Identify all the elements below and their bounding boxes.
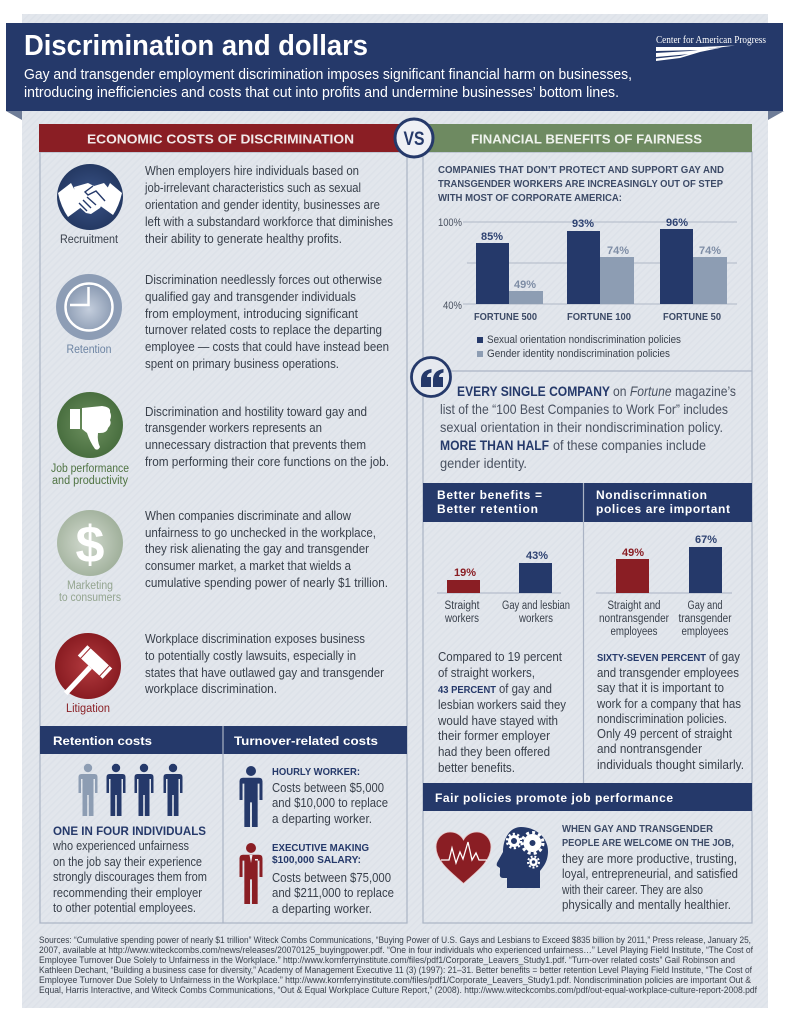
icon: litigation gavel [53, 633, 121, 705]
text: nondiscrimination: Only 49 percent of straight [597, 726, 732, 741]
text: nondiscrimination: nondiscrimination policies. [597, 711, 727, 726]
bar chart: fortune companies: 93% [572, 218, 594, 230]
text: chart heading: TRANSGENDER WORKERS ARE INCREASINGLY OUT OF STEP [438, 178, 723, 190]
text: nondiscrimination: work for a company that has [596, 696, 741, 711]
text: one in four individuals [52, 826, 207, 915]
text: fair policies [561, 823, 738, 912]
bar chart: nondiscrimination: employees [610, 626, 658, 638]
text: fair policies: physically and mentally healthier. [562, 897, 731, 912]
icon: marketing dollar [57, 510, 123, 576]
text: litigation: to potentially costly lawsuits, especially in [145, 648, 356, 663]
subtitle [24, 66, 632, 101]
text: one in four individuals: who experienced unfairness [52, 838, 189, 853]
text: sources: Employee Turnover Due Solely to Unfairness in the Workplace.” http://www.kornferryinstitute.com/files/pdf1/Corporate_Leavers_Study1.pdf. Nondiscrimination policies are important Out & [39, 974, 752, 985]
bar chart: fortune companies: FORTUNE 50 [663, 311, 721, 323]
text: marketing: unfairness to go unchecked in the workplace, [145, 525, 376, 540]
legend: Sexual orientation nondiscrimination policies [487, 334, 681, 346]
bar chart: fortune companies: 85% [481, 231, 503, 243]
text: one in four individuals: strongly discourages them from [53, 869, 207, 884]
label: litigation: Litigation [66, 703, 110, 715]
logo: Center for American Progress [656, 35, 766, 61]
bar chart: fortune companies: 100% [438, 217, 462, 229]
bar chart: fortune companies [438, 217, 737, 323]
bar chart: nondiscrimination: Straight and [608, 600, 660, 612]
text: litigation [144, 631, 385, 696]
text: better benefits: lesbian workers said they [438, 697, 566, 712]
logo: Center for American Progress: Center for American Progress [656, 35, 766, 46]
bar chart: nondiscrimination [596, 534, 732, 638]
header banner [6, 23, 784, 120]
heading: financial benefits: FINANCIAL BENEFITS OF FAIRNESS [471, 132, 702, 146]
bar chart: fortune companies: 74% [607, 245, 629, 257]
text: quote callout [440, 383, 736, 471]
text: quote callout: sexual orientation in their nondiscrimination policy. [440, 419, 723, 435]
text: executive: $100,000 SALARY: [272, 854, 361, 866]
panel: nondiscrimination policies: polices are important [596, 502, 730, 516]
text: executive: Costs between $75,000 [272, 870, 391, 885]
label: marketing to consumers: to consumers [59, 592, 121, 604]
bar chart: fortune companies: 96% [666, 217, 688, 229]
bar chart: nondiscrimination: nontransgender [599, 613, 669, 625]
text: hourly worker: a departing worker. [272, 811, 372, 826]
label: job performance and productivity: and productivity [52, 475, 128, 487]
label: job performance and productivity [51, 463, 129, 487]
text: retention: qualified gay and transgender individuals [145, 289, 356, 304]
icon: hourly worker [240, 766, 262, 827]
bar chart: better benefits: workers [444, 613, 479, 625]
text: recruitment: job-irrelevant characteristics such as sexual [144, 180, 361, 195]
text: quote callout: on Fortune magazine’s [613, 383, 736, 399]
bar chart: nondiscrimination: transgender [678, 613, 732, 625]
text: better benefits: their former employer [438, 728, 551, 743]
text: quote callout: of these companies include [553, 437, 706, 453]
title: Discrimination and dollars [24, 30, 368, 62]
panel: fair policies promote job performance [423, 783, 752, 912]
text: executive: EXECUTIVE MAKING [272, 842, 369, 854]
panel: better benefits [423, 483, 583, 775]
text: quote callout: gender identity. [440, 455, 527, 471]
bar chart: better benefits: 19% [454, 567, 476, 579]
text: recruitment: left with a substandard workforce that diminishes [145, 214, 393, 229]
text: job performance: Discrimination and hostility toward gay and [145, 404, 367, 419]
bar chart: fortune companies: FORTUNE 100 [567, 311, 631, 323]
text: marketing: consumer market, a market that wields a [145, 558, 352, 573]
text: chart heading [438, 164, 724, 204]
label: marketing to consumers: Marketing [67, 580, 113, 592]
text: job performance: transgender workers represents an [145, 420, 322, 435]
bar chart: fortune companies: FORTUNE 500 [474, 311, 537, 323]
icon: heart with heartbeat [436, 832, 491, 884]
bar chart: better benefits: Gay and lesbian [502, 600, 570, 612]
text: litigation: workplace discrimination. [144, 681, 277, 696]
icon: quote mark [412, 358, 450, 396]
panel: economic costs of discrimination [39, 124, 411, 923]
text: better benefits: of straight workers, [438, 665, 535, 680]
icon: four people [78, 764, 182, 816]
label: retention: Retention [66, 344, 112, 356]
text: litigation: states that have outlawed gay and transgender [145, 665, 385, 680]
bar chart: better benefits: Straight [444, 600, 480, 612]
subtitle: Gay and transgender employment discrimination imposes significant financial harm on businesses, [24, 66, 632, 83]
text: nondiscrimination: individuals thought similarly. [597, 757, 744, 772]
panel: nondiscrimination policies [584, 483, 752, 783]
text: sources [39, 934, 757, 995]
panel: retention costs: Retention costs [53, 734, 152, 748]
text: retention: turnover related costs to replace the departing [145, 322, 382, 337]
text: quote callout: EVERY SINGLE COMPANY [457, 383, 611, 399]
legend [477, 334, 681, 360]
heading: economic costs [39, 124, 411, 152]
text: executive: and $211,000 to replace [272, 885, 394, 900]
icon: head with gears [497, 827, 548, 888]
bar chart: better benefits: workers [518, 613, 553, 625]
text: hourly worker: Costs between $5,000 [272, 780, 384, 795]
bar chart: fortune companies: 40% [443, 300, 462, 312]
text: nondiscrimination: say that it is important to [597, 680, 724, 695]
icon: executive [240, 843, 262, 904]
text: retention: Discrimination needlessly forces out otherwise [145, 272, 382, 287]
text: quote callout: MORE THAN HALF [440, 437, 549, 453]
bar chart: fortune companies: 49% [514, 279, 536, 291]
bar chart: nondiscrimination: 67% [695, 534, 717, 546]
text: litigation: Workplace discrimination exposes business [145, 631, 365, 646]
text: job performance [145, 404, 389, 469]
text: marketing: When companies discriminate and allow [145, 508, 351, 523]
icon: job performance thumbs down [57, 392, 123, 458]
text: retention: from employment, introducing significant [145, 306, 358, 321]
text: recruitment: When employers hire individuals based on [145, 163, 359, 178]
text: recruitment: their ability to generate healthy profits. [145, 231, 342, 246]
icon: marketing dollar: $ [76, 516, 105, 574]
text: quote callout: list of the “100 Best Companies to Work For” includes [440, 401, 728, 417]
panel: nondiscrimination policies: Nondiscrimnation [596, 488, 707, 502]
text: job performance: unnecessary distraction that prevents them [145, 437, 366, 452]
panel: financial benefits of fairness [412, 124, 752, 923]
text: retention: spent on primary business operations. [145, 356, 339, 371]
subtitle: introducing inefficiencies and costs that cut into profits and undermine businesses’ bottom lines. [24, 84, 619, 101]
text: executive: a departing worker. [272, 901, 372, 916]
text: fair policies: WHEN GAY AND TRANSGENDER [562, 823, 713, 835]
text: hourly worker: HOURLY WORKER: [272, 766, 360, 778]
text: nondiscrimination: SIXTY-SEVEN PERCENT [597, 652, 707, 664]
text: better benefits: of gay and [499, 681, 552, 696]
text: executive [272, 842, 394, 916]
icon: recruitment handshake [57, 164, 123, 230]
text: one in four individuals: ONE IN FOUR INDIVIDUALS [53, 826, 206, 838]
text: retention [145, 272, 389, 371]
label: job performance and productivity: Job performance [51, 463, 129, 475]
text: one in four individuals: recommending their employer [53, 885, 203, 900]
text: better benefits [437, 649, 566, 775]
text: fair policies: loyal, entrepreneurial, and satisfied [562, 866, 738, 881]
text: marketing: cumulative spending power of nearly $1 trillion. [145, 575, 388, 590]
panel: turnover-related costs [223, 726, 407, 923]
panel: retention costs [40, 726, 223, 915]
text: hourly worker [272, 766, 388, 826]
text: one in four individuals: to other potential employees. [53, 900, 196, 915]
text: better benefits: would have stayed with [437, 713, 558, 728]
text: better benefits: 43 PERCENT [438, 684, 497, 696]
text: fair policies: with their career. They are also [561, 882, 703, 897]
label: marketing to consumers [59, 580, 121, 604]
text: chart heading: COMPANIES THAT DON’T PROTECT AND SUPPORT GAY AND [438, 164, 724, 176]
heading: economic costs: ECONOMIC COSTS OF DISCRIMINATION [87, 132, 354, 146]
text: retention: employee — costs that could have instead been [145, 339, 389, 354]
text: recruitment [144, 163, 393, 246]
text: fair policies: PEOPLE ARE WELCOME ON THE JOB, [562, 837, 734, 849]
text: recruitment: orientation and gender identity, businesses are [145, 197, 380, 212]
panel: better benefits: Better benefits = [437, 488, 542, 502]
text: hourly worker: and $10,000 to replace [272, 795, 388, 810]
bar chart: nondiscrimination: Gay and [688, 600, 722, 612]
bar chart: nondiscrimination: employees [682, 626, 729, 638]
icon: retention clock [56, 274, 122, 340]
text: nondiscrimination: and transgender employees [597, 665, 739, 680]
icon: VS badge [395, 119, 433, 157]
panel: turnover-related costs: Turnover-related costs [234, 734, 378, 748]
panel: better benefits: Better retention [437, 502, 538, 516]
text: nondiscrimination [596, 649, 744, 772]
bar chart: better benefits [437, 550, 570, 625]
text: better benefits: Compared to 19 percent [438, 649, 562, 664]
text: fair policies: they are more productive, trusting, [562, 851, 737, 866]
heading: financial benefits [425, 124, 752, 152]
text: chart heading: WITH MOST OF CORPORATE AMERICA: [438, 192, 622, 204]
panel: fair policies promote job performance: Fair policies promote job performance [435, 791, 673, 805]
text: nondiscrimination: and nontransgender [597, 741, 703, 756]
bar chart: nondiscrimination: 49% [622, 547, 644, 559]
text: marketing [145, 508, 388, 590]
legend: Gender identity nondiscrimination policies [487, 348, 670, 360]
bar chart: better benefits: 43% [526, 550, 548, 562]
label: recruitment: Recruitment [60, 234, 119, 246]
text: one in four individuals: on the job say their experience [53, 854, 202, 869]
bar chart: fortune companies: 74% [699, 245, 721, 257]
icon: VS badge: VS [404, 129, 424, 150]
text: marketing: they risk alienating the gay and transgender [145, 541, 370, 556]
text: nondiscrimination: of gay [709, 649, 740, 664]
text: better benefits: better benefits. [438, 760, 515, 775]
text: sources: Employee Turnover Due Solely to Unfairness in the Workplace.” http://www.kornferryinstitute.com/files/pdf1/Corporate_Leavers_Study1.pdf. “Turn-over related costs” Gail Robinson and [39, 954, 735, 965]
text: job performance: from performing their core functions on the job. [145, 454, 389, 469]
text: better benefits: had they been offered [438, 744, 550, 759]
